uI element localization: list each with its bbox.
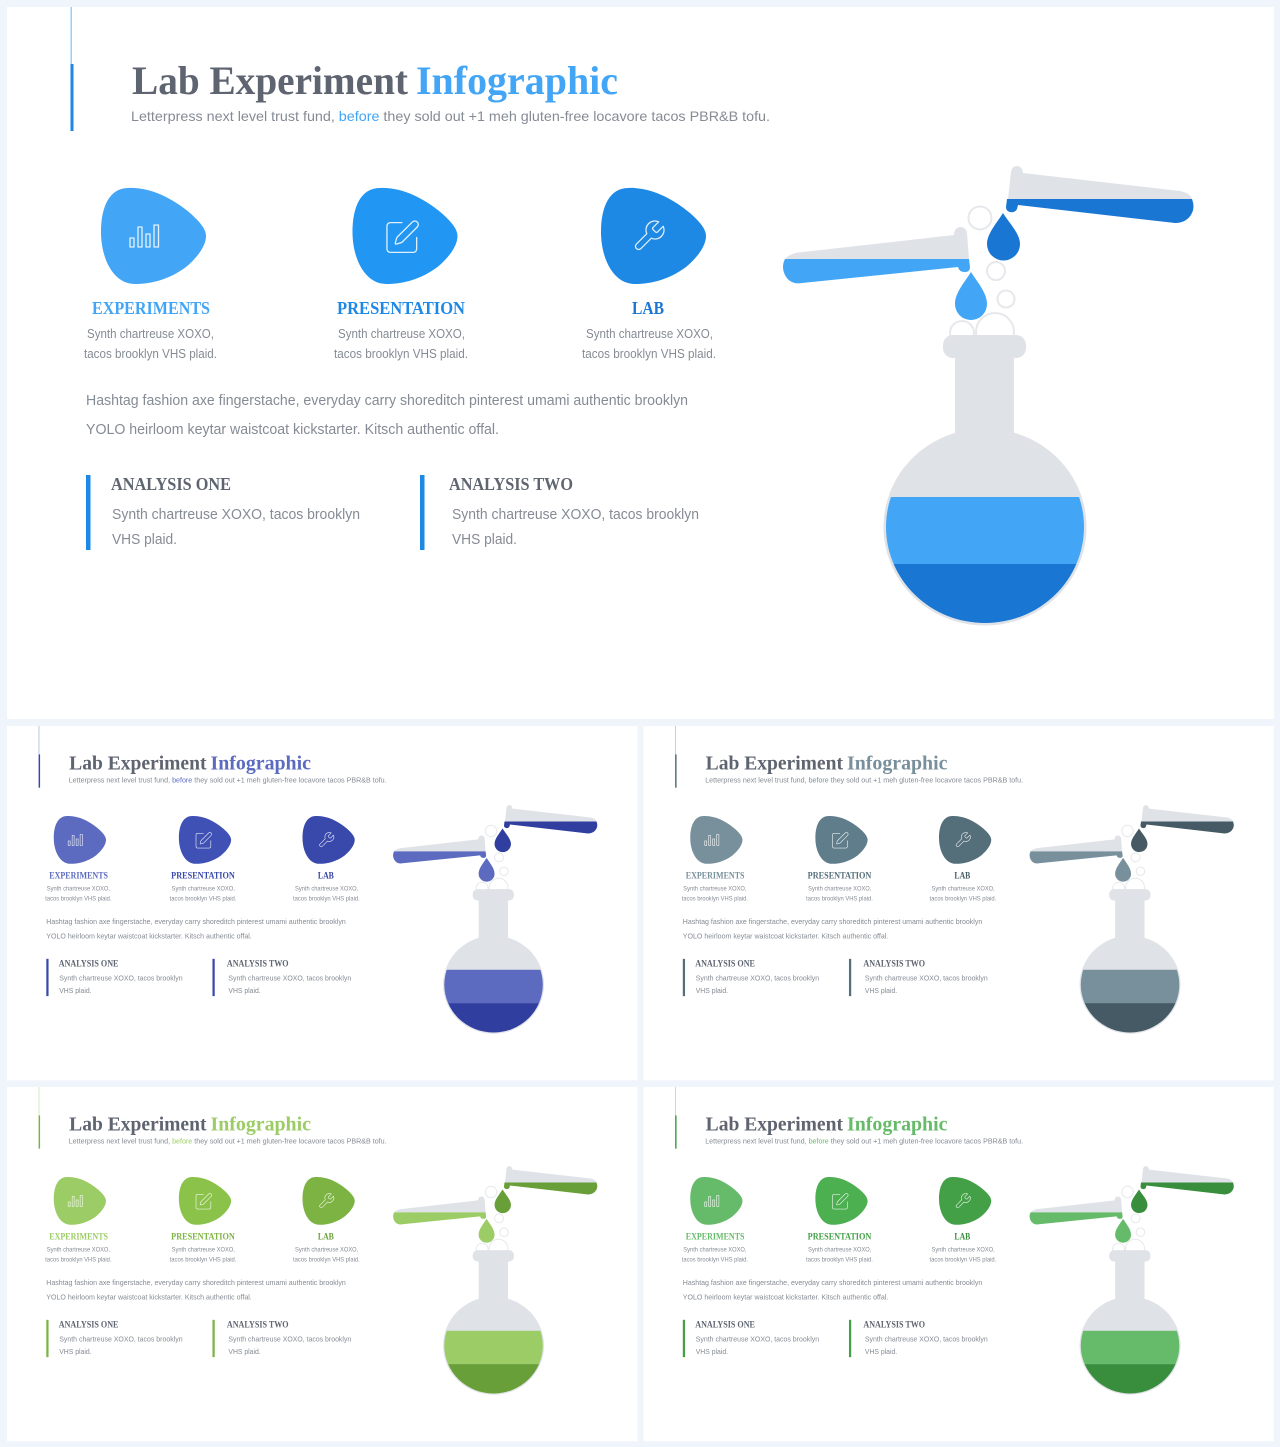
column: lab bbox=[930, 816, 996, 903]
icon: bar chart bbox=[690, 816, 743, 864]
illustration: flask and test tubes bbox=[393, 805, 597, 1035]
text bbox=[806, 886, 873, 903]
paragraph bbox=[683, 917, 982, 940]
analysis one: Synth chartreuse XOXO, tacos brooklyn bbox=[696, 974, 819, 983]
icon: edit note bbox=[352, 188, 458, 284]
analysis two: VHS plaid. bbox=[865, 1347, 897, 1356]
text: Synth chartreuse XOXO, bbox=[932, 1247, 995, 1254]
paragraph: YOLO heirloom keytar waistcoat kickstarter. Kitsch authentic offal. bbox=[683, 931, 888, 940]
column: experiments bbox=[682, 1177, 748, 1264]
bubbles bbox=[476, 825, 508, 897]
accent line bbox=[70, 7, 74, 131]
text: Synth chartreuse XOXO, bbox=[683, 1247, 747, 1254]
light drop bbox=[1115, 1219, 1131, 1243]
left test tube bbox=[783, 227, 970, 283]
analysis two: ANALYSIS TWO bbox=[863, 1319, 925, 1329]
analysis two: VHS plaid. bbox=[228, 1347, 261, 1356]
heading: EXPERIMENTS bbox=[49, 1232, 108, 1242]
accent line bbox=[675, 1087, 677, 1149]
text bbox=[170, 886, 237, 903]
text: Synth chartreuse XOXO, bbox=[683, 886, 747, 893]
heading: PRESENTATION bbox=[171, 1232, 235, 1242]
subtitle: Letterpress next level trust fund, before they sold out +1 meh gluten-free locavore tacos PBR&B tofu. bbox=[705, 1139, 1023, 1146]
bubbles bbox=[1113, 1186, 1145, 1258]
title: Lab Experiment bbox=[706, 1113, 843, 1135]
paragraph: Hashtag fashion axe fingerstache, everyday carry shoreditch pinterest umami authentic brooklyn bbox=[46, 917, 346, 926]
title: Infographic bbox=[210, 1113, 311, 1135]
paragraph: YOLO heirloom keytar waistcoat kickstarter. Kitsch authentic offal. bbox=[46, 931, 252, 940]
icon: wrench bbox=[939, 1177, 991, 1225]
analysis one: VHS plaid. bbox=[112, 531, 177, 548]
panel: green slide bbox=[644, 1087, 1274, 1441]
analysis one: VHS plaid. bbox=[696, 986, 728, 995]
column: presentation bbox=[806, 1177, 873, 1264]
title: Lab Experiment bbox=[69, 752, 207, 774]
analysis two: Synth chartreuse XOXO, tacos brooklyn bbox=[452, 506, 699, 523]
text: tacos brooklyn VHS plaid. bbox=[170, 896, 237, 903]
illustration: flask and test tubes bbox=[393, 1166, 597, 1396]
analysis one: ANALYSIS ONE bbox=[59, 1319, 118, 1329]
icon: wrench bbox=[303, 816, 355, 864]
light drop bbox=[1115, 858, 1131, 882]
text bbox=[582, 326, 716, 361]
right test tube bbox=[504, 1166, 597, 1194]
text: Synth chartreuse XOXO, bbox=[172, 886, 235, 893]
analysis one: ANALYSIS ONE bbox=[111, 474, 231, 494]
illustration: flask and test tubes bbox=[783, 166, 1194, 629]
right test tube bbox=[504, 805, 597, 833]
analysis two bbox=[849, 958, 988, 996]
analysis one bbox=[86, 474, 360, 550]
heading: LAB bbox=[632, 298, 664, 318]
analysis one bbox=[683, 1319, 819, 1357]
left test tube bbox=[393, 835, 486, 863]
analysis one: Synth chartreuse XOXO, tacos brooklyn bbox=[112, 506, 360, 523]
analysis one bbox=[683, 958, 819, 996]
analysis one: ANALYSIS ONE bbox=[59, 958, 118, 968]
analysis two: ANALYSIS TWO bbox=[449, 474, 573, 494]
analysis two bbox=[849, 1319, 988, 1357]
subtitle: Letterpress next level trust fund, before they sold out +1 meh gluten-free locavore tacos PBR&B tofu. bbox=[69, 778, 387, 785]
text: Synth chartreuse XOXO, bbox=[295, 886, 358, 893]
text bbox=[930, 1247, 996, 1264]
icon: bar chart bbox=[690, 1177, 743, 1225]
analysis one: ANALYSIS ONE bbox=[695, 958, 755, 968]
analysis two: ANALYSIS TWO bbox=[863, 958, 925, 968]
analysis two: ANALYSIS TWO bbox=[227, 958, 289, 968]
text bbox=[682, 1247, 748, 1264]
accent line bbox=[39, 726, 40, 788]
heading: EXPERIMENTS bbox=[92, 298, 210, 318]
analysis two: Synth chartreuse XOXO, tacos brooklyn bbox=[228, 974, 351, 983]
flask bbox=[1078, 889, 1182, 1035]
heading: PRESENTATION bbox=[171, 871, 235, 881]
paragraph: YOLO heirloom keytar waistcoat kickstarter. Kitsch authentic offal. bbox=[86, 421, 499, 438]
heading: EXPERIMENTS bbox=[49, 871, 108, 881]
title bbox=[706, 1113, 948, 1135]
text: Synth chartreuse XOXO, bbox=[87, 326, 214, 341]
paragraph: Hashtag fashion axe fingerstache, everyday carry shoreditch pinterest umami authentic brooklyn bbox=[46, 1278, 346, 1287]
heading: PRESENTATION bbox=[808, 871, 872, 881]
analysis two: Synth chartreuse XOXO, tacos brooklyn bbox=[865, 1335, 988, 1344]
paragraph bbox=[46, 917, 346, 940]
column: lab bbox=[930, 1177, 996, 1264]
analysis one: Synth chartreuse XOXO, tacos brooklyn bbox=[59, 974, 183, 983]
icon: bar chart bbox=[54, 816, 106, 864]
text bbox=[84, 326, 217, 361]
panel: indigo slide bbox=[7, 726, 637, 1080]
left test tube bbox=[1030, 835, 1123, 863]
title bbox=[69, 752, 311, 774]
dark drop bbox=[495, 828, 511, 852]
analysis one: VHS plaid. bbox=[59, 1347, 92, 1356]
analysis two: VHS plaid. bbox=[865, 986, 897, 995]
bubbles bbox=[476, 1186, 508, 1258]
icon: wrench bbox=[601, 188, 706, 284]
text: tacos brooklyn VHS plaid. bbox=[930, 896, 996, 903]
bubbles bbox=[1113, 825, 1145, 897]
text bbox=[45, 1247, 112, 1264]
title bbox=[706, 752, 948, 774]
bubbles bbox=[950, 206, 1014, 351]
text: tacos brooklyn VHS plaid. bbox=[170, 1257, 237, 1264]
analysis two: Synth chartreuse XOXO, tacos brooklyn bbox=[228, 1335, 351, 1344]
analysis one: ANALYSIS ONE bbox=[695, 1319, 755, 1329]
text: tacos brooklyn VHS plaid. bbox=[334, 346, 468, 361]
analysis one: Synth chartreuse XOXO, tacos brooklyn bbox=[59, 1335, 183, 1344]
paragraph bbox=[46, 1278, 346, 1301]
icon: wrench bbox=[303, 1177, 355, 1225]
flask bbox=[1078, 1250, 1182, 1396]
text: Synth chartreuse XOXO, bbox=[808, 886, 872, 893]
heading: LAB bbox=[954, 871, 970, 881]
text: Synth chartreuse XOXO, bbox=[47, 886, 110, 893]
title: Infographic bbox=[847, 1113, 948, 1135]
paragraph: Hashtag fashion axe fingerstache, everyday carry shoreditch pinterest umami authentic brooklyn bbox=[683, 1278, 982, 1287]
analysis two: ANALYSIS TWO bbox=[227, 1319, 289, 1329]
text: tacos brooklyn VHS plaid. bbox=[930, 1257, 996, 1264]
text: tacos brooklyn VHS plaid. bbox=[45, 896, 112, 903]
icon: wrench bbox=[939, 816, 991, 864]
panel: light green slide bbox=[7, 1087, 637, 1441]
dark drop bbox=[1131, 828, 1147, 852]
column: presentation bbox=[806, 816, 873, 903]
text: tacos brooklyn VHS plaid. bbox=[806, 896, 873, 903]
text: tacos brooklyn VHS plaid. bbox=[293, 896, 360, 903]
text: tacos brooklyn VHS plaid. bbox=[84, 346, 217, 361]
text: Synth chartreuse XOXO, bbox=[808, 1247, 872, 1254]
accent line bbox=[39, 1087, 40, 1149]
subtitle: Letterpress next level trust fund, before they sold out +1 meh gluten-free locavore tacos PBR&B tofu. bbox=[69, 1139, 387, 1146]
heading: LAB bbox=[318, 871, 334, 881]
paragraph bbox=[683, 1278, 982, 1301]
column: lab bbox=[293, 1177, 360, 1264]
accent line bbox=[675, 726, 677, 788]
text bbox=[293, 1247, 360, 1264]
heading: PRESENTATION bbox=[337, 298, 465, 318]
right test tube bbox=[1141, 805, 1234, 833]
title bbox=[132, 58, 618, 103]
text: tacos brooklyn VHS plaid. bbox=[45, 1257, 112, 1264]
paragraph: YOLO heirloom keytar waistcoat kickstarter. Kitsch authentic offal. bbox=[46, 1292, 252, 1301]
title: Lab Experiment bbox=[706, 752, 843, 774]
paragraph bbox=[86, 392, 688, 438]
text: Synth chartreuse XOXO, bbox=[932, 886, 995, 893]
column: experiments bbox=[45, 816, 112, 903]
analysis one: VHS plaid. bbox=[696, 1347, 728, 1356]
analysis two: VHS plaid. bbox=[228, 986, 261, 995]
analysis two bbox=[212, 958, 351, 996]
icon: bar chart bbox=[54, 1177, 106, 1225]
icon: edit note bbox=[815, 1177, 868, 1225]
left test tube bbox=[1030, 1196, 1123, 1224]
subtitle: Letterpress next level trust fund, before they sold out +1 meh gluten-free locavore tacos PBR&B tofu. bbox=[705, 778, 1023, 785]
analysis one: VHS plaid. bbox=[59, 986, 92, 995]
text bbox=[930, 886, 996, 903]
text bbox=[682, 886, 748, 903]
subtitle: Letterpress next level trust fund, before they sold out +1 meh gluten-free locavore tacos PBR&B tofu. bbox=[131, 108, 770, 124]
column: presentation bbox=[170, 1177, 237, 1264]
text: Synth chartreuse XOXO, bbox=[338, 326, 465, 341]
right test tube bbox=[1141, 1166, 1234, 1194]
paragraph: Hashtag fashion axe fingerstache, everyday carry shoreditch pinterest umami authentic brooklyn bbox=[86, 392, 688, 409]
icon: edit note bbox=[179, 816, 231, 864]
illustration: flask and test tubes bbox=[1030, 1166, 1234, 1396]
title bbox=[69, 1113, 311, 1135]
text bbox=[293, 886, 360, 903]
title: Lab Experiment bbox=[132, 58, 409, 103]
title: Infographic bbox=[847, 752, 948, 774]
text bbox=[334, 326, 468, 361]
dark drop bbox=[987, 213, 1020, 260]
analysis one: Synth chartreuse XOXO, tacos brooklyn bbox=[696, 1335, 819, 1344]
left test tube bbox=[393, 1196, 486, 1224]
dark drop bbox=[1131, 1189, 1147, 1213]
illustration: flask and test tubes bbox=[1030, 805, 1234, 1035]
panel: blue-grey slide bbox=[644, 726, 1274, 1080]
light drop bbox=[479, 858, 495, 882]
column: experiments bbox=[84, 188, 217, 361]
analysis two bbox=[212, 1319, 351, 1357]
icon: edit note bbox=[179, 1177, 231, 1225]
title: Lab Experiment bbox=[69, 1113, 207, 1135]
analysis one bbox=[46, 958, 183, 996]
flask bbox=[441, 889, 546, 1035]
heading: EXPERIMENTS bbox=[686, 1232, 745, 1242]
flask bbox=[441, 1250, 546, 1396]
light drop bbox=[479, 1219, 495, 1243]
paragraph: Hashtag fashion axe fingerstache, everyday carry shoreditch pinterest umami authentic brooklyn bbox=[683, 917, 982, 926]
icon: edit note bbox=[815, 816, 868, 864]
column: experiments bbox=[682, 816, 748, 903]
text: tacos brooklyn VHS plaid. bbox=[682, 896, 748, 903]
text bbox=[45, 886, 112, 903]
paragraph: YOLO heirloom keytar waistcoat kickstarter. Kitsch authentic offal. bbox=[683, 1292, 888, 1301]
text: tacos brooklyn VHS plaid. bbox=[682, 1257, 748, 1264]
text: Synth chartreuse XOXO, bbox=[586, 326, 713, 341]
text: tacos brooklyn VHS plaid. bbox=[582, 346, 716, 361]
heading: EXPERIMENTS bbox=[686, 871, 745, 881]
column: experiments bbox=[45, 1177, 112, 1264]
text bbox=[806, 1247, 873, 1264]
text: tacos brooklyn VHS plaid. bbox=[806, 1257, 873, 1264]
text bbox=[170, 1247, 237, 1264]
light drop bbox=[955, 272, 987, 320]
column: lab bbox=[582, 188, 716, 361]
column: lab bbox=[293, 816, 360, 903]
column: presentation bbox=[170, 816, 237, 903]
text: Synth chartreuse XOXO, bbox=[172, 1247, 235, 1254]
panel: main blue slide bbox=[7, 7, 1274, 719]
right test tube bbox=[1006, 166, 1194, 223]
title: Infographic bbox=[416, 58, 618, 103]
heading: LAB bbox=[318, 1232, 334, 1242]
title: Infographic bbox=[210, 752, 311, 774]
text: tacos brooklyn VHS plaid. bbox=[293, 1257, 360, 1264]
heading: PRESENTATION bbox=[808, 1232, 872, 1242]
column: presentation bbox=[334, 188, 468, 361]
text: Synth chartreuse XOXO, bbox=[47, 1247, 110, 1254]
analysis two: VHS plaid. bbox=[452, 531, 517, 548]
text: Synth chartreuse XOXO, bbox=[295, 1247, 358, 1254]
analysis two: Synth chartreuse XOXO, tacos brooklyn bbox=[865, 974, 988, 983]
analysis one bbox=[46, 1319, 183, 1357]
analysis two bbox=[420, 474, 699, 550]
dark drop bbox=[495, 1189, 511, 1213]
icon: bar chart bbox=[101, 188, 206, 284]
heading: LAB bbox=[954, 1232, 970, 1242]
flask bbox=[880, 335, 1090, 629]
